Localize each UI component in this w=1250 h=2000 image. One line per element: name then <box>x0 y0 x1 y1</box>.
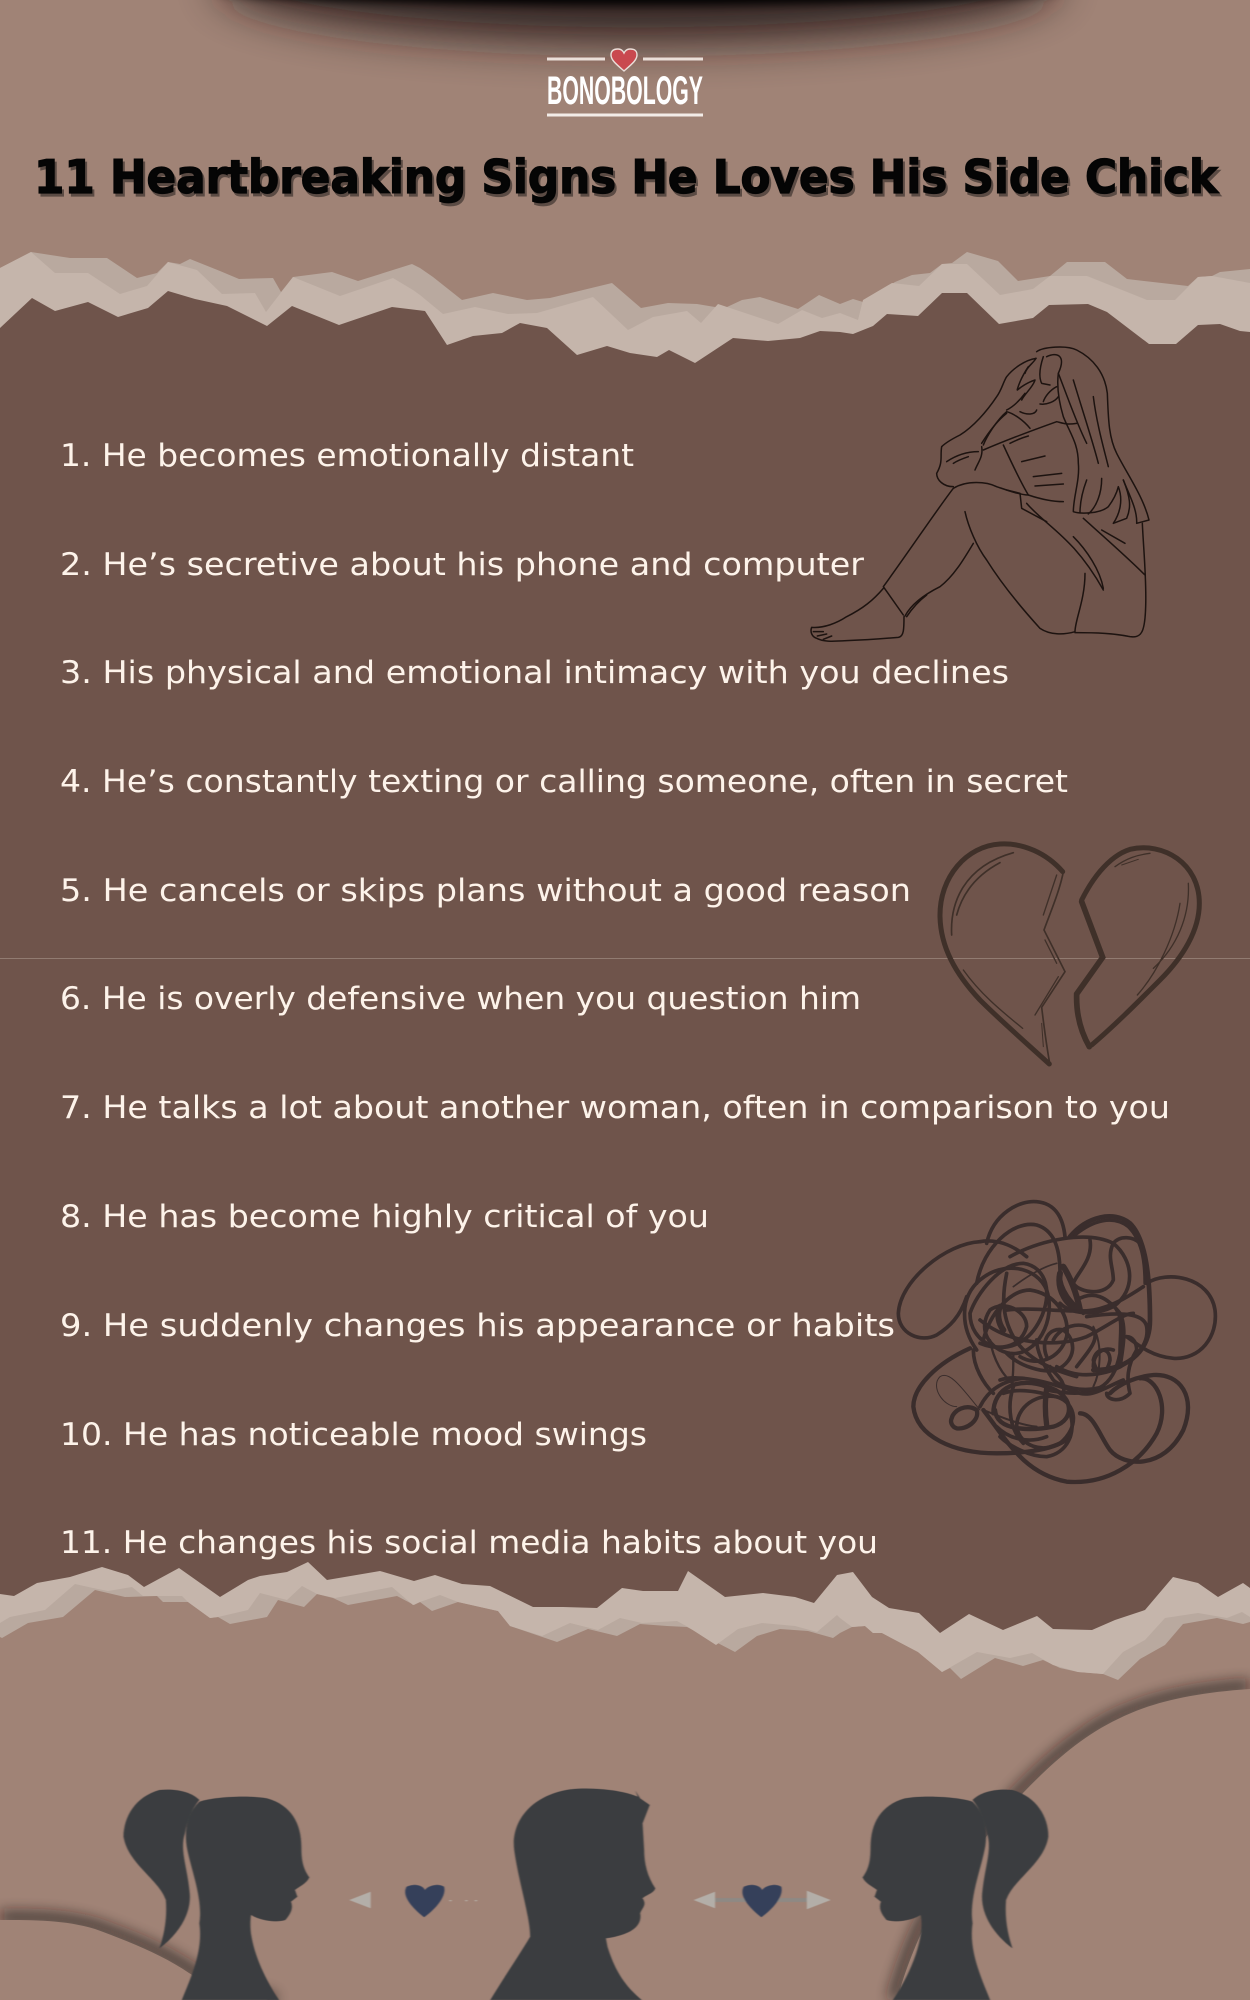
arrow: right, double-headed <box>694 1891 831 1909</box>
silhouette: woman right <box>863 1790 1048 2000</box>
icon: left heart <box>405 1885 444 1917</box>
logo: Bonobology <box>547 49 703 116</box>
icon: sad woman line drawing <box>811 347 1149 641</box>
list of eleven signs <box>60 438 1170 1561</box>
sign 9: 9. He suddenly changes his appearance or habits <box>60 1308 895 1344</box>
sign 1: 1. He becomes emotionally distant <box>60 438 634 474</box>
sign 6: 6. He is overly defensive when you question him <box>60 981 861 1017</box>
sign 7: 7. He talks a lot about another woman, often in comparison to you <box>60 1090 1170 1126</box>
torn paper edge: bottom <box>0 1555 1250 1680</box>
silhouette: woman left <box>124 1790 309 2000</box>
title: 11 Heartbreaking Signs He Loves His Side Chick <box>34 150 1219 204</box>
horizontal seam line <box>0 958 1250 959</box>
panel: dark list background <box>0 399 1250 1559</box>
icon: logo heart <box>611 49 637 71</box>
sign 11: 11. He changes his social media habits about you <box>60 1525 878 1561</box>
sign 8: 8. He has become highly critical of you <box>60 1199 709 1235</box>
icon: tangled scribble <box>898 1202 1215 1482</box>
silhouette: man center <box>490 1788 655 2000</box>
icon: right heart <box>742 1885 782 1917</box>
sign 2: 2. He’s secretive about his phone and computer <box>60 547 864 583</box>
icon: broken heart <box>940 844 1199 1065</box>
sign 5: 5. He cancels or skips plans without a good reason <box>60 873 911 909</box>
top shadow shape <box>216 0 1060 42</box>
logo: Bonobology: BONOBOLOGY <box>547 69 703 113</box>
sign 3: 3. His physical and emotional intimacy with you declines <box>60 655 1009 691</box>
sign 4: 4. He’s constantly texting or calling someone, often in secret <box>60 764 1068 800</box>
silhouettes scene <box>124 1788 1048 2000</box>
sign 10: 10. He has noticeable mood swings <box>60 1417 647 1453</box>
torn paper edge: top <box>0 252 1250 400</box>
decorative curved shapes with soft shadow <box>0 1686 1250 2000</box>
arrow: left, fading <box>349 1892 478 1908</box>
